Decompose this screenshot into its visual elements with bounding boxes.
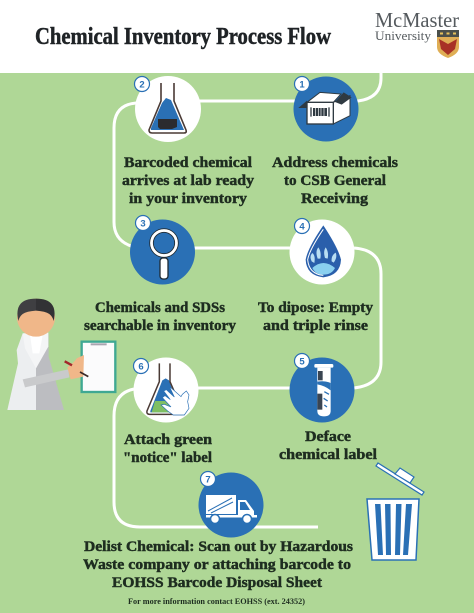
footer contact note: For more information contact EOHSS (ext. 24352) [128, 597, 305, 606]
badge: 5: 5 [299, 356, 305, 368]
coat [7, 333, 36, 410]
title: Chemical Inventory Process Flow [35, 24, 332, 50]
step 6: green notice label [123, 358, 212, 466]
flow connector line [114, 73, 381, 527]
label: step 7 [83, 539, 353, 591]
McMaster University logo: McMaster [375, 8, 459, 32]
label: step 5: chemical label [279, 447, 377, 463]
step 5: deface label [279, 354, 377, 463]
label: step 2: Barcoded chemical [124, 155, 252, 171]
hair [17, 299, 55, 321]
McMaster University logo [375, 8, 459, 58]
badge: 1: 1 [299, 80, 305, 90]
badge: 6: 6 [138, 362, 144, 372]
arm [23, 369, 69, 387]
hand and pen [65, 355, 88, 379]
badge: 7: 7 [205, 474, 211, 486]
clipboard [82, 342, 115, 392]
step 7: delist chemical [83, 472, 353, 591]
icon: flask and hand [134, 358, 198, 422]
badge: 2: 2 [139, 80, 145, 90]
icon: test tube [290, 358, 354, 422]
label: step 7: EOHSS Barcode Disposal Sheet [112, 575, 322, 591]
McMaster University logo: University [375, 29, 432, 43]
label: step 1: Address chemicals [272, 155, 398, 171]
label: step 3: searchable in inventory [84, 318, 237, 334]
icon: truck [198, 472, 264, 538]
step 4: triple rinse [258, 218, 374, 334]
label: step 2: arrives at lab ready [122, 173, 255, 189]
badge: 3 [136, 216, 150, 230]
header band [0, 0, 474, 73]
step 3: searchable [84, 216, 237, 334]
label: step 4: To dipose: Empty [258, 300, 374, 316]
label: step 6: Attach green [124, 432, 212, 448]
illustration: scientist with clipboard [7, 299, 115, 410]
label: step 6: "notice" label [123, 450, 212, 466]
label: step 6 [123, 432, 212, 466]
label: step 1: Receiving [301, 191, 369, 207]
label: step 7: Waste company or attaching barcode to [83, 557, 351, 573]
label: step 1 [272, 155, 398, 207]
label: step 7: Delist Chemical: Scan out by Hazardous [84, 539, 353, 555]
badge: 3: 3 [140, 218, 146, 230]
label: step 1: to CSB General [284, 173, 386, 189]
label: step 5: Deface [305, 429, 352, 445]
badge: 7 [200, 472, 216, 486]
label: step 2 [122, 155, 255, 207]
label: step 4: and triple rinse [263, 318, 369, 334]
step 2: barcoded chemical arrives [122, 76, 255, 207]
badge: 4: 4 [299, 222, 305, 232]
icon: magnifying glass [130, 220, 195, 284]
label: step 3 [84, 300, 237, 334]
icon: box with barcode [294, 76, 358, 142]
label: step 5 [279, 429, 377, 463]
icon: flask with barcode [135, 76, 201, 142]
label: step 3: Chemicals and SDSs [95, 300, 225, 316]
label: step 4 [258, 300, 374, 334]
icon: water drop [290, 220, 354, 284]
icon: trash can [367, 463, 424, 560]
label: step 2: in your inventory [129, 191, 248, 207]
face [17, 299, 55, 337]
step 1: address chemicals [272, 76, 398, 207]
